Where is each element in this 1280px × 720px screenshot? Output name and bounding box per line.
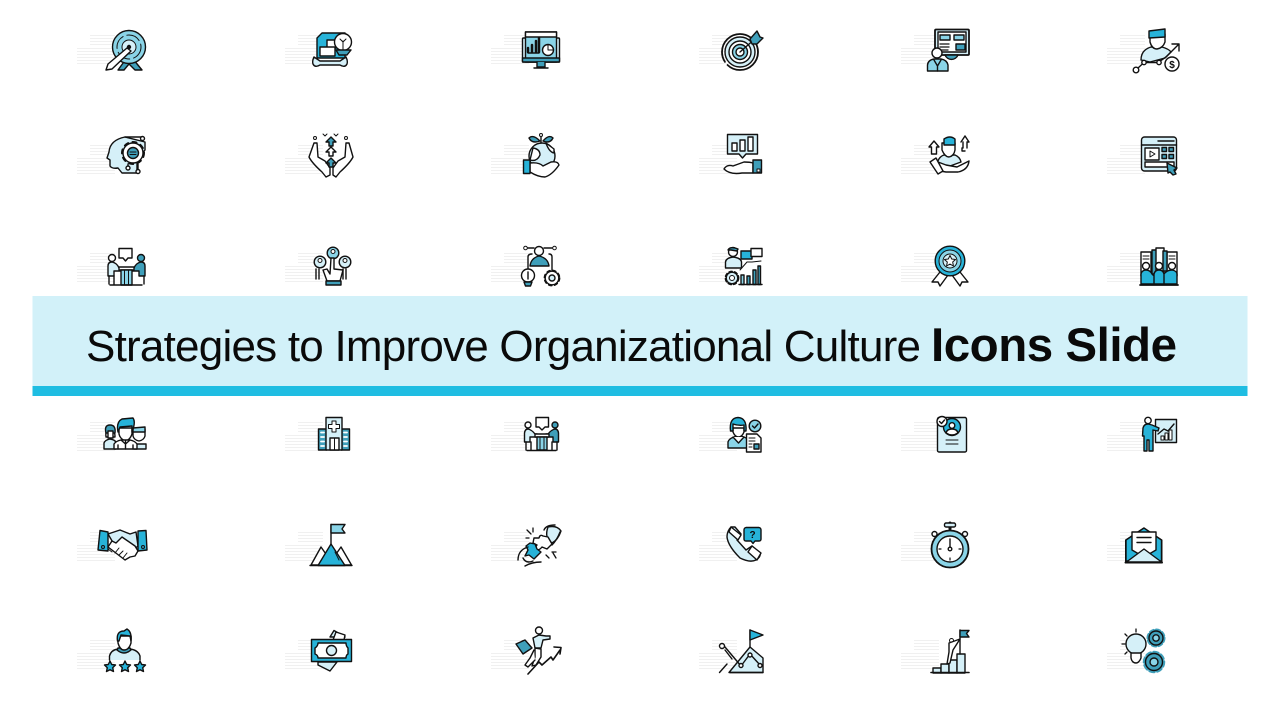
icon: open envelope with letter <box>1126 528 1162 563</box>
icon: light bulb and gears <box>1122 629 1164 672</box>
icon: document, light bulb and wrench <box>313 33 352 66</box>
icon: presenter with growth chart <box>1142 417 1176 451</box>
icon: hospital building <box>318 418 350 450</box>
icon: telephone with question bubble <box>727 527 761 561</box>
icon: browser window with media and cursor <box>1142 137 1177 175</box>
icon: banknotes <box>312 630 352 671</box>
icon: head with gear <box>107 136 145 174</box>
icon: man with growth chart and dollar coin <box>1133 29 1179 73</box>
icon: man on hand with rising arrows <box>929 136 969 174</box>
icon: mountain with flag <box>310 524 352 566</box>
icon: hand presenting bar chart <box>724 134 762 174</box>
title: Strategies to Improve Organizational Culture <box>86 322 921 371</box>
icon: hands joining puzzle pieces <box>518 525 561 566</box>
icon: stopwatch <box>932 523 968 568</box>
icon: person with document and check <box>728 418 761 452</box>
icon: bullseye with arrow <box>722 31 763 70</box>
title: Icons Slide <box>931 319 1177 372</box>
icon: monitor dashboard <box>522 32 560 68</box>
icon: target with pencil <box>106 30 146 70</box>
panel: title banner <box>32 296 1248 396</box>
icon: resume with photo and check <box>937 416 966 452</box>
icon: person with three stars <box>104 629 146 672</box>
icon: meeting at table <box>524 418 558 450</box>
icon: award badge with star <box>932 246 968 286</box>
icon: climber on steps with flag <box>931 630 969 673</box>
icon: presenter with flow chart board <box>928 30 969 71</box>
icon: businessman running up arrow <box>516 627 561 674</box>
icon: handshake <box>98 530 147 560</box>
icon: mountain chart with flag <box>720 630 763 672</box>
icon: person with chat bubbles, gear and chart <box>726 248 762 284</box>
icon: two people meeting at table <box>108 248 145 285</box>
icon: person connected to bulb and gear <box>522 246 560 286</box>
icon: team in front of city buildings <box>1140 248 1178 285</box>
icon: man with growth chart and dollar coin: $ <box>1169 60 1175 71</box>
icon: hand touching people circles <box>314 247 351 285</box>
icon: telephone with question bubble: ? <box>749 530 756 541</box>
icon: team of three people <box>104 418 146 449</box>
icon: globe with plant held in hand <box>524 134 559 177</box>
icon: hands raising arrows <box>309 134 353 177</box>
